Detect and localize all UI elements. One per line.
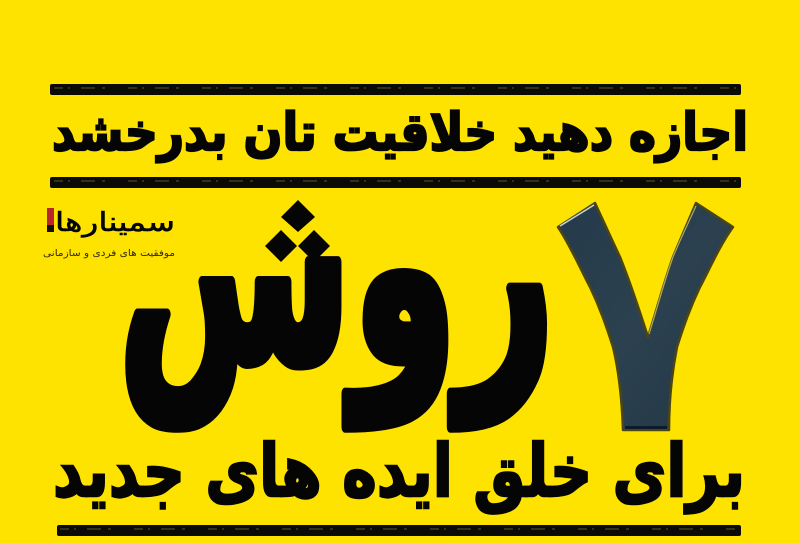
big word: ways: روش [118, 110, 555, 429]
heading: let your creativity shine: اجازه دهید خلاقیت تان بدرخشد [52, 103, 748, 163]
numeral seven [558, 203, 733, 430]
middle rule [50, 177, 741, 188]
logo [43, 207, 175, 259]
bottom rule [57, 525, 741, 536]
subheading: for creating new ideas: برای خلق ایده های جدید [53, 430, 745, 514]
top rule [50, 84, 741, 95]
logo: سمینارها [55, 207, 175, 237]
logo tagline: موفقیت های فردی و سازمانی [43, 248, 175, 259]
